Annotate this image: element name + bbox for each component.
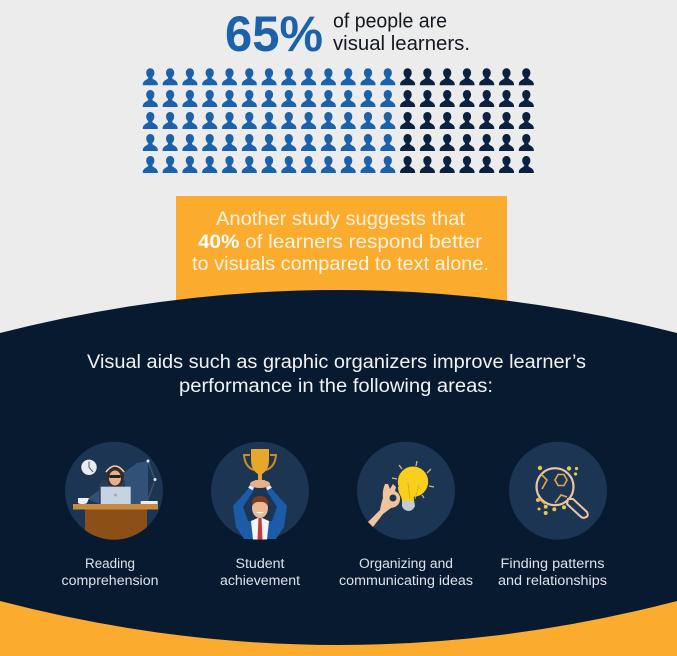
label: finding patterns: Finding patterns — [500, 556, 605, 571]
callout: 40% of learners: to visuals compared to text alone. — [192, 254, 489, 275]
icon: reading comprehension — [65, 442, 163, 542]
panel heading: Visual aids such as graphic organizers improve learner’s — [87, 352, 586, 373]
label: organizing ideas — [339, 556, 473, 588]
label: organizing ideas: communicating ideas — [339, 573, 473, 588]
label: finding patterns: and relationships — [498, 573, 607, 588]
headline statistic — [225, 6, 470, 62]
label: organizing ideas: Organizing and — [359, 556, 453, 571]
label: student achievement: achievement — [220, 573, 300, 588]
callout: 40% of learners: 40% of learners respond better — [198, 232, 483, 253]
panel heading — [87, 352, 586, 397]
dark panel — [0, 290, 677, 645]
label: finding patterns — [498, 556, 607, 588]
callout: 40% of learners — [176, 196, 507, 308]
label: reading comprehension — [62, 556, 158, 588]
panel heading: performance in the following areas: — [179, 376, 493, 397]
headline statistic: 65% — [225, 6, 323, 62]
icon: student achievement — [211, 442, 309, 540]
icon: finding patterns — [509, 442, 607, 540]
label: student achievement: Student — [236, 556, 285, 571]
footer band — [0, 590, 677, 656]
callout: 40% of learners: Another study suggests that — [216, 209, 466, 230]
label: reading comprehension: Reading — [85, 556, 135, 571]
label: student achievement — [220, 556, 300, 588]
icon: organizing ideas — [357, 442, 455, 540]
headline statistic: visual learners. — [333, 33, 470, 55]
pictogram: 65 of 100 people highlighted — [143, 68, 534, 173]
headline statistic: of people are — [333, 10, 447, 32]
label: reading comprehension: comprehension — [62, 573, 158, 588]
